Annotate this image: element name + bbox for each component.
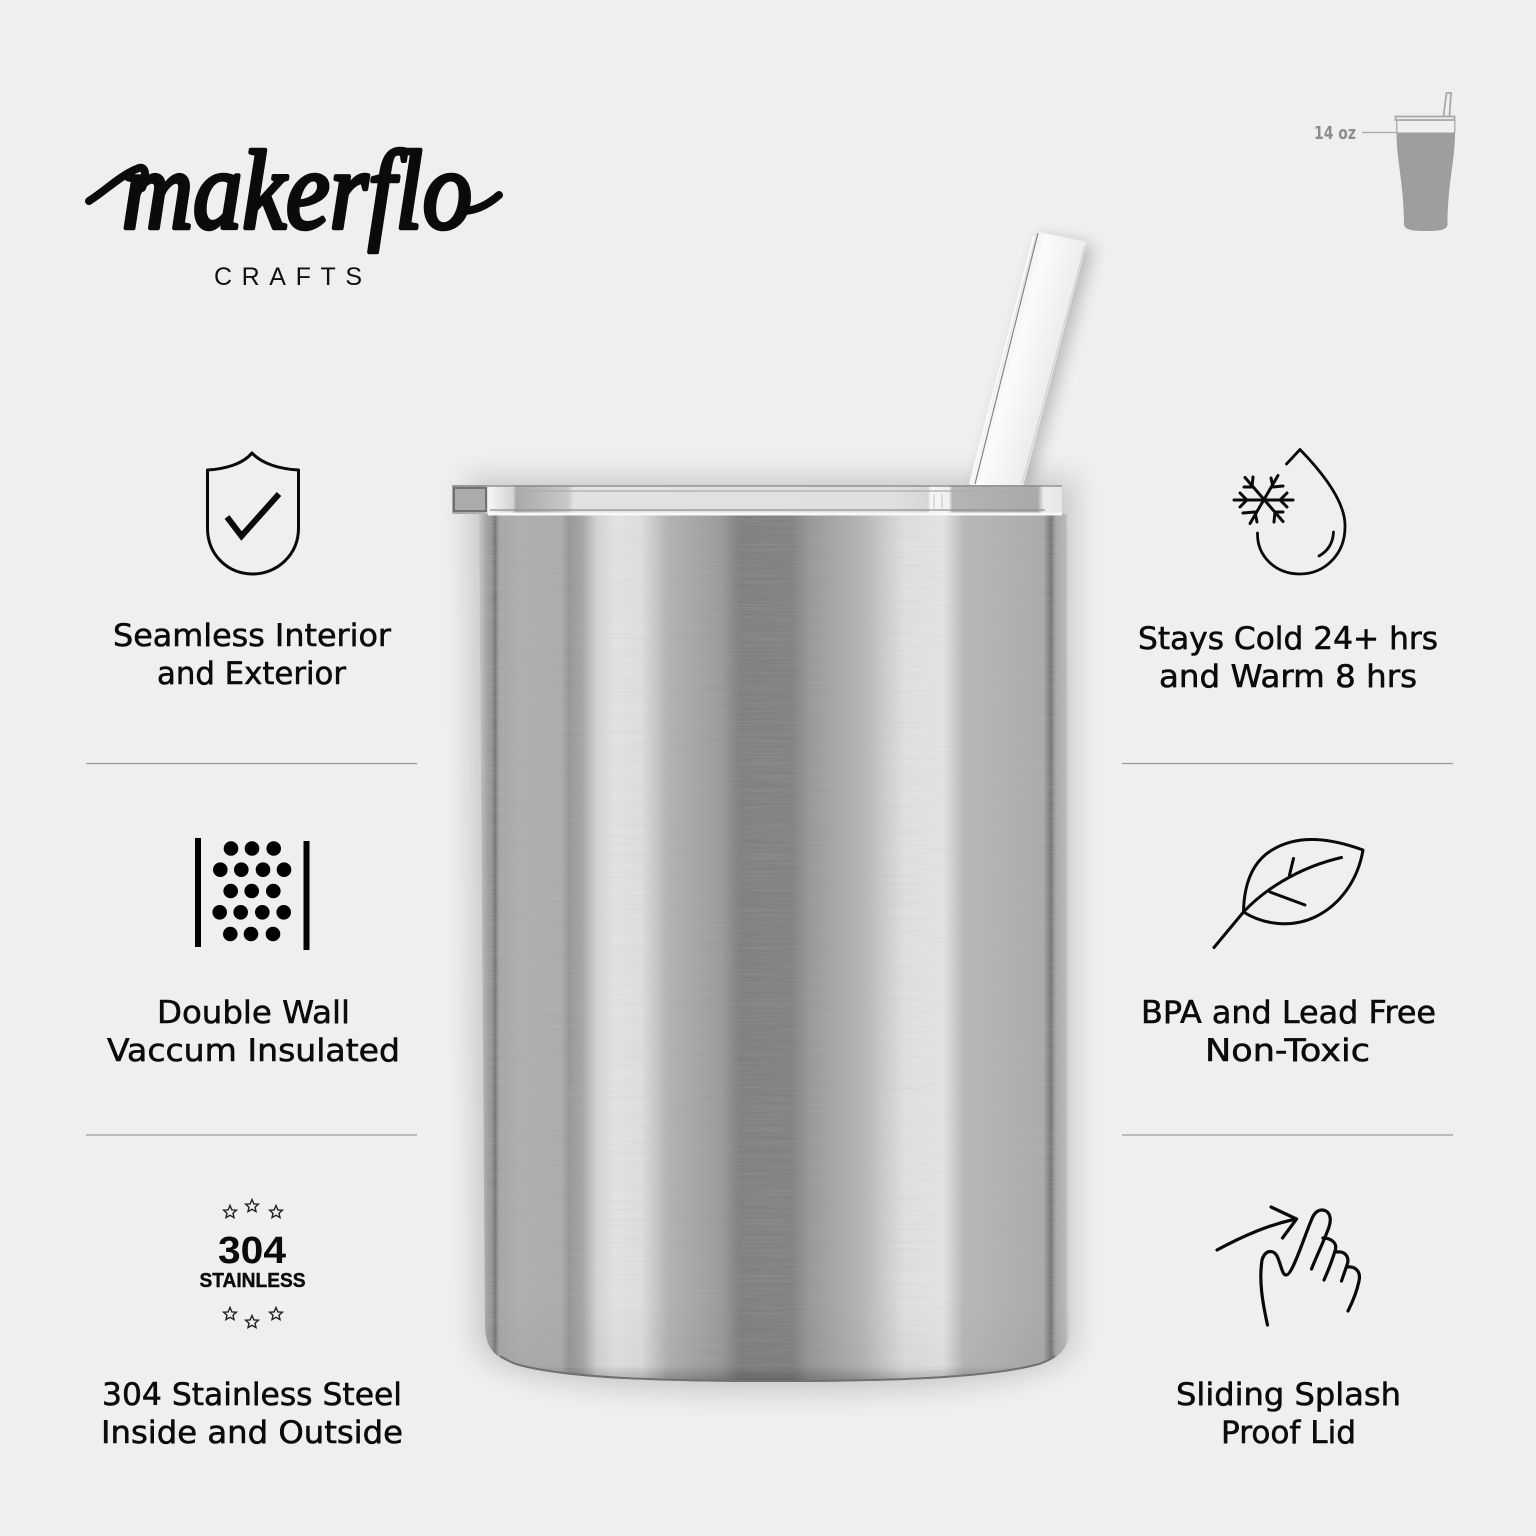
text: 304 stainless	[101, 1377, 403, 1451]
text: 304 stainless: Inside and Outside	[101, 1415, 403, 1451]
icon: leaf	[1214, 839, 1363, 948]
text: double wall: Vaccum Insulated	[107, 1033, 400, 1069]
panel: stays cold and warm	[1138, 450, 1438, 695]
tumbler product	[452, 232, 1094, 1392]
straw shadow	[976, 236, 1094, 486]
logo wordmark: makerflo	[122, 129, 472, 253]
text: sliding splash	[1176, 1377, 1401, 1451]
text: 304 stainless: 304 Stainless Steel	[102, 1377, 402, 1413]
text: seamless interior	[113, 618, 391, 692]
panel: sliding splash proof lid	[1176, 1207, 1401, 1451]
icon: 304 stainless badge: 304	[218, 1230, 286, 1272]
text: seamless interior: Seamless Interior	[113, 618, 391, 654]
capacity label: 14 oz	[1314, 123, 1356, 144]
mini cup outline	[1397, 120, 1455, 133]
steel body	[479, 514, 1070, 1382]
panel: double wall vacuum insulated	[107, 838, 400, 1069]
icon: snowflake and drop	[1234, 450, 1345, 574]
mini cup fill	[1396, 132, 1455, 231]
logo lead-in and tail swashes	[89, 168, 499, 211]
text: BPA: Non-Toxic	[1205, 1033, 1370, 1069]
icon: shield with check	[208, 453, 298, 574]
text: sliding splash: Sliding Splash	[1176, 1377, 1401, 1413]
logo sub-line: CRAFTS	[214, 263, 362, 291]
text: sliding splash: Proof Lid	[1221, 1415, 1356, 1451]
text: BPA	[1141, 995, 1436, 1069]
text: BPA: BPA and Lead Free	[1141, 995, 1436, 1031]
icon: hand swipe with arrow	[1217, 1207, 1359, 1325]
icon: 304 stainless badge	[200, 1200, 306, 1328]
text: stays cold: and Warm 8 hrs	[1159, 659, 1417, 695]
glass straw	[970, 232, 1086, 487]
mini straw	[1444, 93, 1451, 116]
panel: BPA and lead free	[1141, 839, 1436, 1069]
capacity diagram: 14 oz	[1314, 93, 1455, 231]
text: stays cold: Stays Cold 24+ hrs	[1138, 621, 1438, 657]
mini lid	[1396, 116, 1454, 120]
clear sliding lid	[452, 485, 1062, 514]
text: stays cold	[1138, 621, 1438, 695]
text: seamless interior: and Exterior	[157, 656, 346, 692]
tumbler shadow	[468, 478, 1075, 1392]
logo: makerflo crafts	[89, 129, 499, 291]
icon: 304 stainless badge: STAINLESS	[200, 1270, 306, 1292]
panel: seamless interior and exterior	[113, 453, 391, 692]
panel: 304 stainless steel	[101, 1200, 403, 1451]
text: double wall	[107, 995, 400, 1069]
text: double wall: Double Wall	[157, 995, 350, 1031]
icon: double wall with dots	[195, 838, 310, 950]
